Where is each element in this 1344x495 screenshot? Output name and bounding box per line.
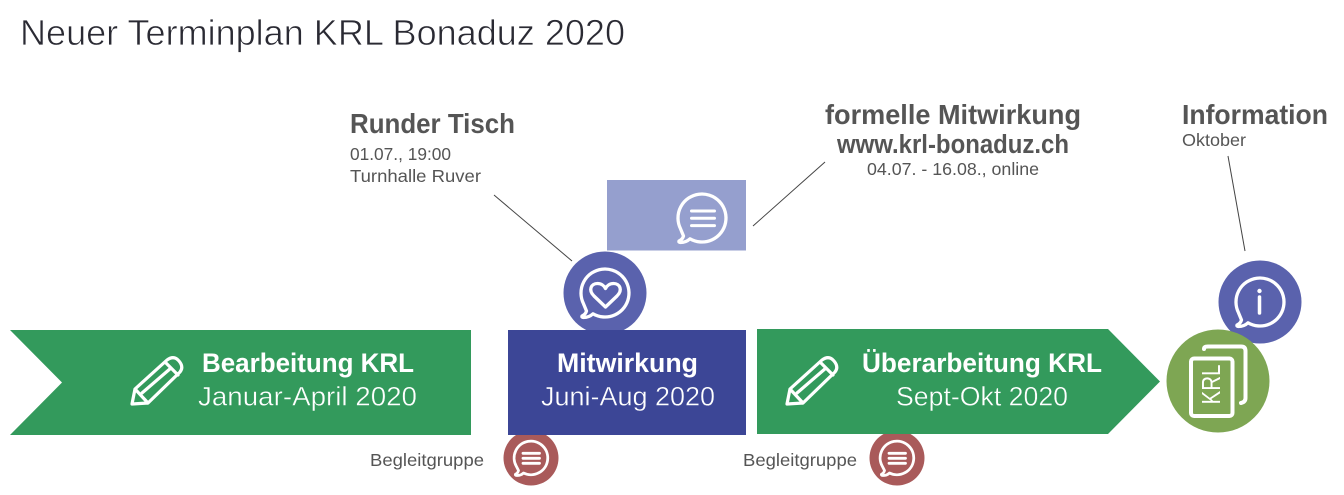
panel: formelle Mitwirkung online — [607, 180, 746, 250]
text block: Runder Tisch: Runder Tisch — [350, 108, 515, 139]
title: Neuer Terminplan KRL Bonaduz 2020 — [20, 12, 625, 53]
icon: chat bubble — [678, 194, 726, 242]
icon: KRL document circle — [1166, 330, 1270, 432]
text block: Information — [1182, 99, 1328, 150]
icon: KRL document circle: KRL — [1198, 364, 1226, 404]
icon: information circle — [1218, 260, 1302, 344]
panel: Bearbeitung KRL — [10, 330, 471, 435]
label: Januar-April 2020: Januar-April 2020 — [198, 382, 417, 412]
icon: pencil — [132, 358, 182, 404]
text block: Runder Tisch: Turnhalle Ruver — [350, 166, 481, 186]
connector: Runder Tisch — [494, 195, 572, 261]
text block: formelle Mitwirkung — [825, 99, 1081, 179]
label: Bearbeitung KRL: Bearbeitung KRL — [202, 348, 414, 378]
label: Überarbeitung KRL: Überarbeitung KRL — [862, 348, 1102, 378]
panel: Mitwirkung — [508, 330, 746, 435]
text block: formelle Mitwirkung: www.krl-bonaduz.ch — [836, 131, 1069, 159]
text block: Runder Tisch — [350, 108, 515, 186]
label: Begleitgruppe left: Begleitgruppe — [370, 450, 484, 470]
panel: Überarbeitung KRL — [757, 329, 1160, 434]
label: Sept-Okt 2020: Sept-Okt 2020 — [896, 382, 1068, 412]
text block: Runder Tisch: 01.07., 19:00 — [350, 144, 451, 164]
icon: heart speech bubble circle — [564, 252, 646, 334]
text block: formelle Mitwirkung: formelle Mitwirkung — [825, 99, 1081, 130]
connector: Information — [1228, 156, 1245, 251]
label: Juni-Aug 2020: Juni-Aug 2020 — [541, 382, 715, 412]
label: Begleitgruppe right: Begleitgruppe — [743, 450, 857, 470]
text block: Information: Information — [1182, 99, 1328, 130]
icon: pencil — [787, 358, 837, 404]
icon: Begleitgruppe chat left — [504, 430, 558, 486]
text block: formelle Mitwirkung: 04.07. - 16.08., online — [867, 159, 1039, 179]
connector: formelle Mitwirkung — [753, 162, 825, 226]
label: Mitwirkung: Mitwirkung — [557, 348, 698, 378]
icon: Begleitgruppe chat right — [870, 430, 924, 486]
text block: Information: Oktober — [1182, 130, 1246, 150]
